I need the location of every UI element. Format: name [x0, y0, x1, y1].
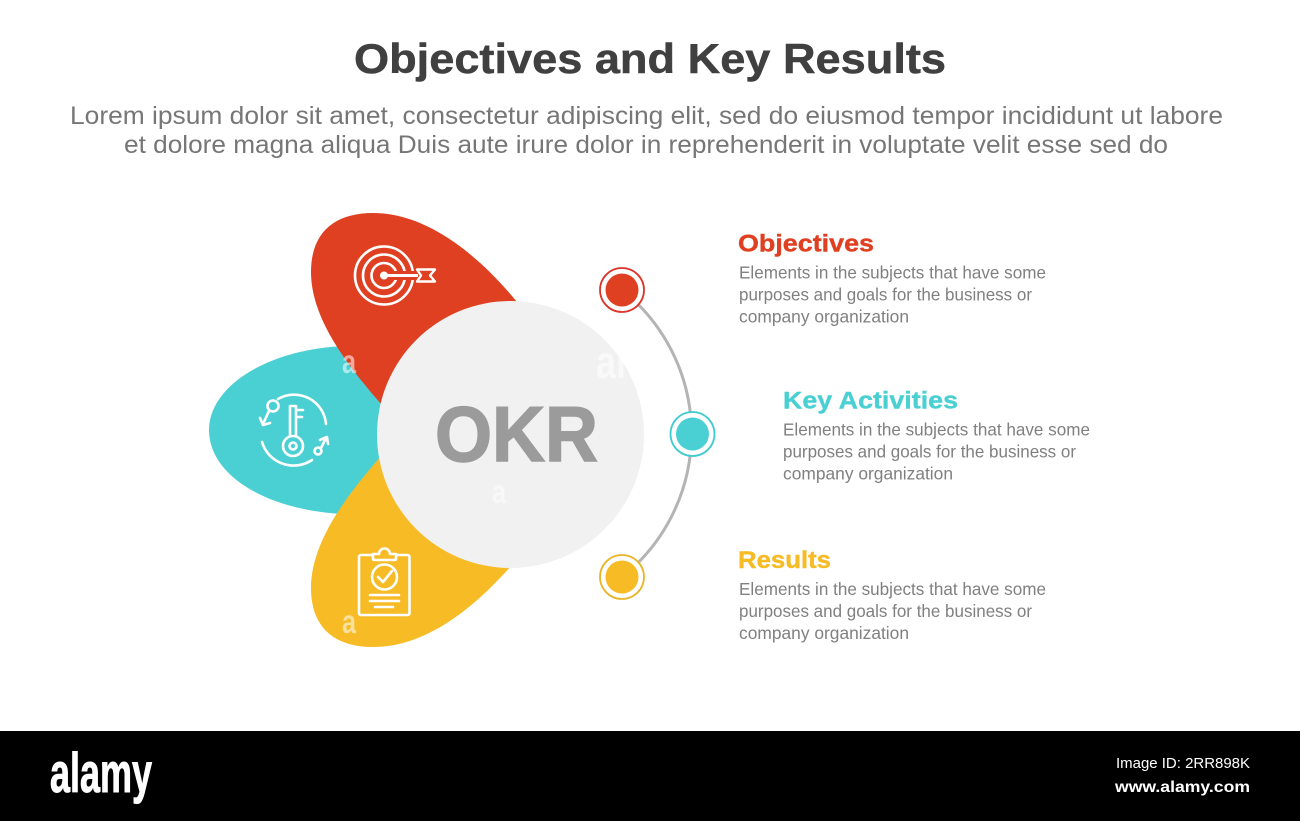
text block: key activities: purposes and goals for the business or	[783, 442, 1076, 462]
footer image id: Image ID: 2RR898K	[1116, 756, 1250, 772]
watermark marks	[342, 336, 626, 640]
text block: results: Results	[738, 547, 831, 574]
text block: key activities: company organization	[783, 464, 953, 484]
node: objectives	[600, 268, 644, 312]
intro paragraph	[70, 102, 1223, 159]
text block: objectives: company organization	[739, 306, 909, 326]
footer bar	[0, 731, 1300, 821]
watermark marks: al	[596, 336, 626, 388]
text block: objectives: Objectives	[738, 230, 874, 258]
text block: key activities: Elements in the subjects that have some	[783, 420, 1090, 440]
text block: results	[738, 547, 1046, 643]
center label: OKR	[435, 390, 598, 478]
intro paragraph: et dolore magna aliqua Duis aute irure dolor in reprehenderit in voluptate velit esse sed do	[124, 131, 1168, 159]
center circle	[377, 301, 644, 568]
icon: key with cycle arrows	[260, 395, 328, 466]
text block: objectives: purposes and goals for the business or	[739, 284, 1032, 304]
node: key activities	[670, 412, 714, 456]
text block: objectives	[738, 230, 1046, 326]
text block: results: company organization	[739, 623, 909, 643]
title: Objectives and Key Results	[354, 35, 946, 82]
text block: objectives: Elements in the subjects that have some	[739, 262, 1046, 282]
icon: clipboard with check	[359, 548, 410, 615]
footer logo: alamy	[50, 741, 152, 804]
petal: objectives	[311, 213, 517, 404]
text block: results: purposes and goals for the business or	[739, 601, 1032, 621]
petal: key activities	[209, 346, 430, 514]
icon: target with arrow	[355, 246, 435, 304]
text block: key activities	[783, 388, 1090, 484]
intro paragraph: Lorem ipsum dolor sit amet, consectetur adipiscing elit, sed do eiusmod tempor incididunt ut labore	[70, 102, 1223, 130]
petal: results	[311, 456, 511, 647]
node: results	[600, 555, 644, 599]
petal diagram	[209, 213, 644, 647]
footer website: www.alamy.com	[1114, 779, 1250, 796]
text block: results: Elements in the subjects that have some	[739, 579, 1046, 599]
watermark marks: a	[342, 343, 356, 380]
watermark marks: a	[342, 603, 356, 640]
watermark marks: a	[492, 473, 506, 510]
text block: key activities: Key Activities	[783, 388, 958, 414]
connector arc	[622, 290, 691, 577]
